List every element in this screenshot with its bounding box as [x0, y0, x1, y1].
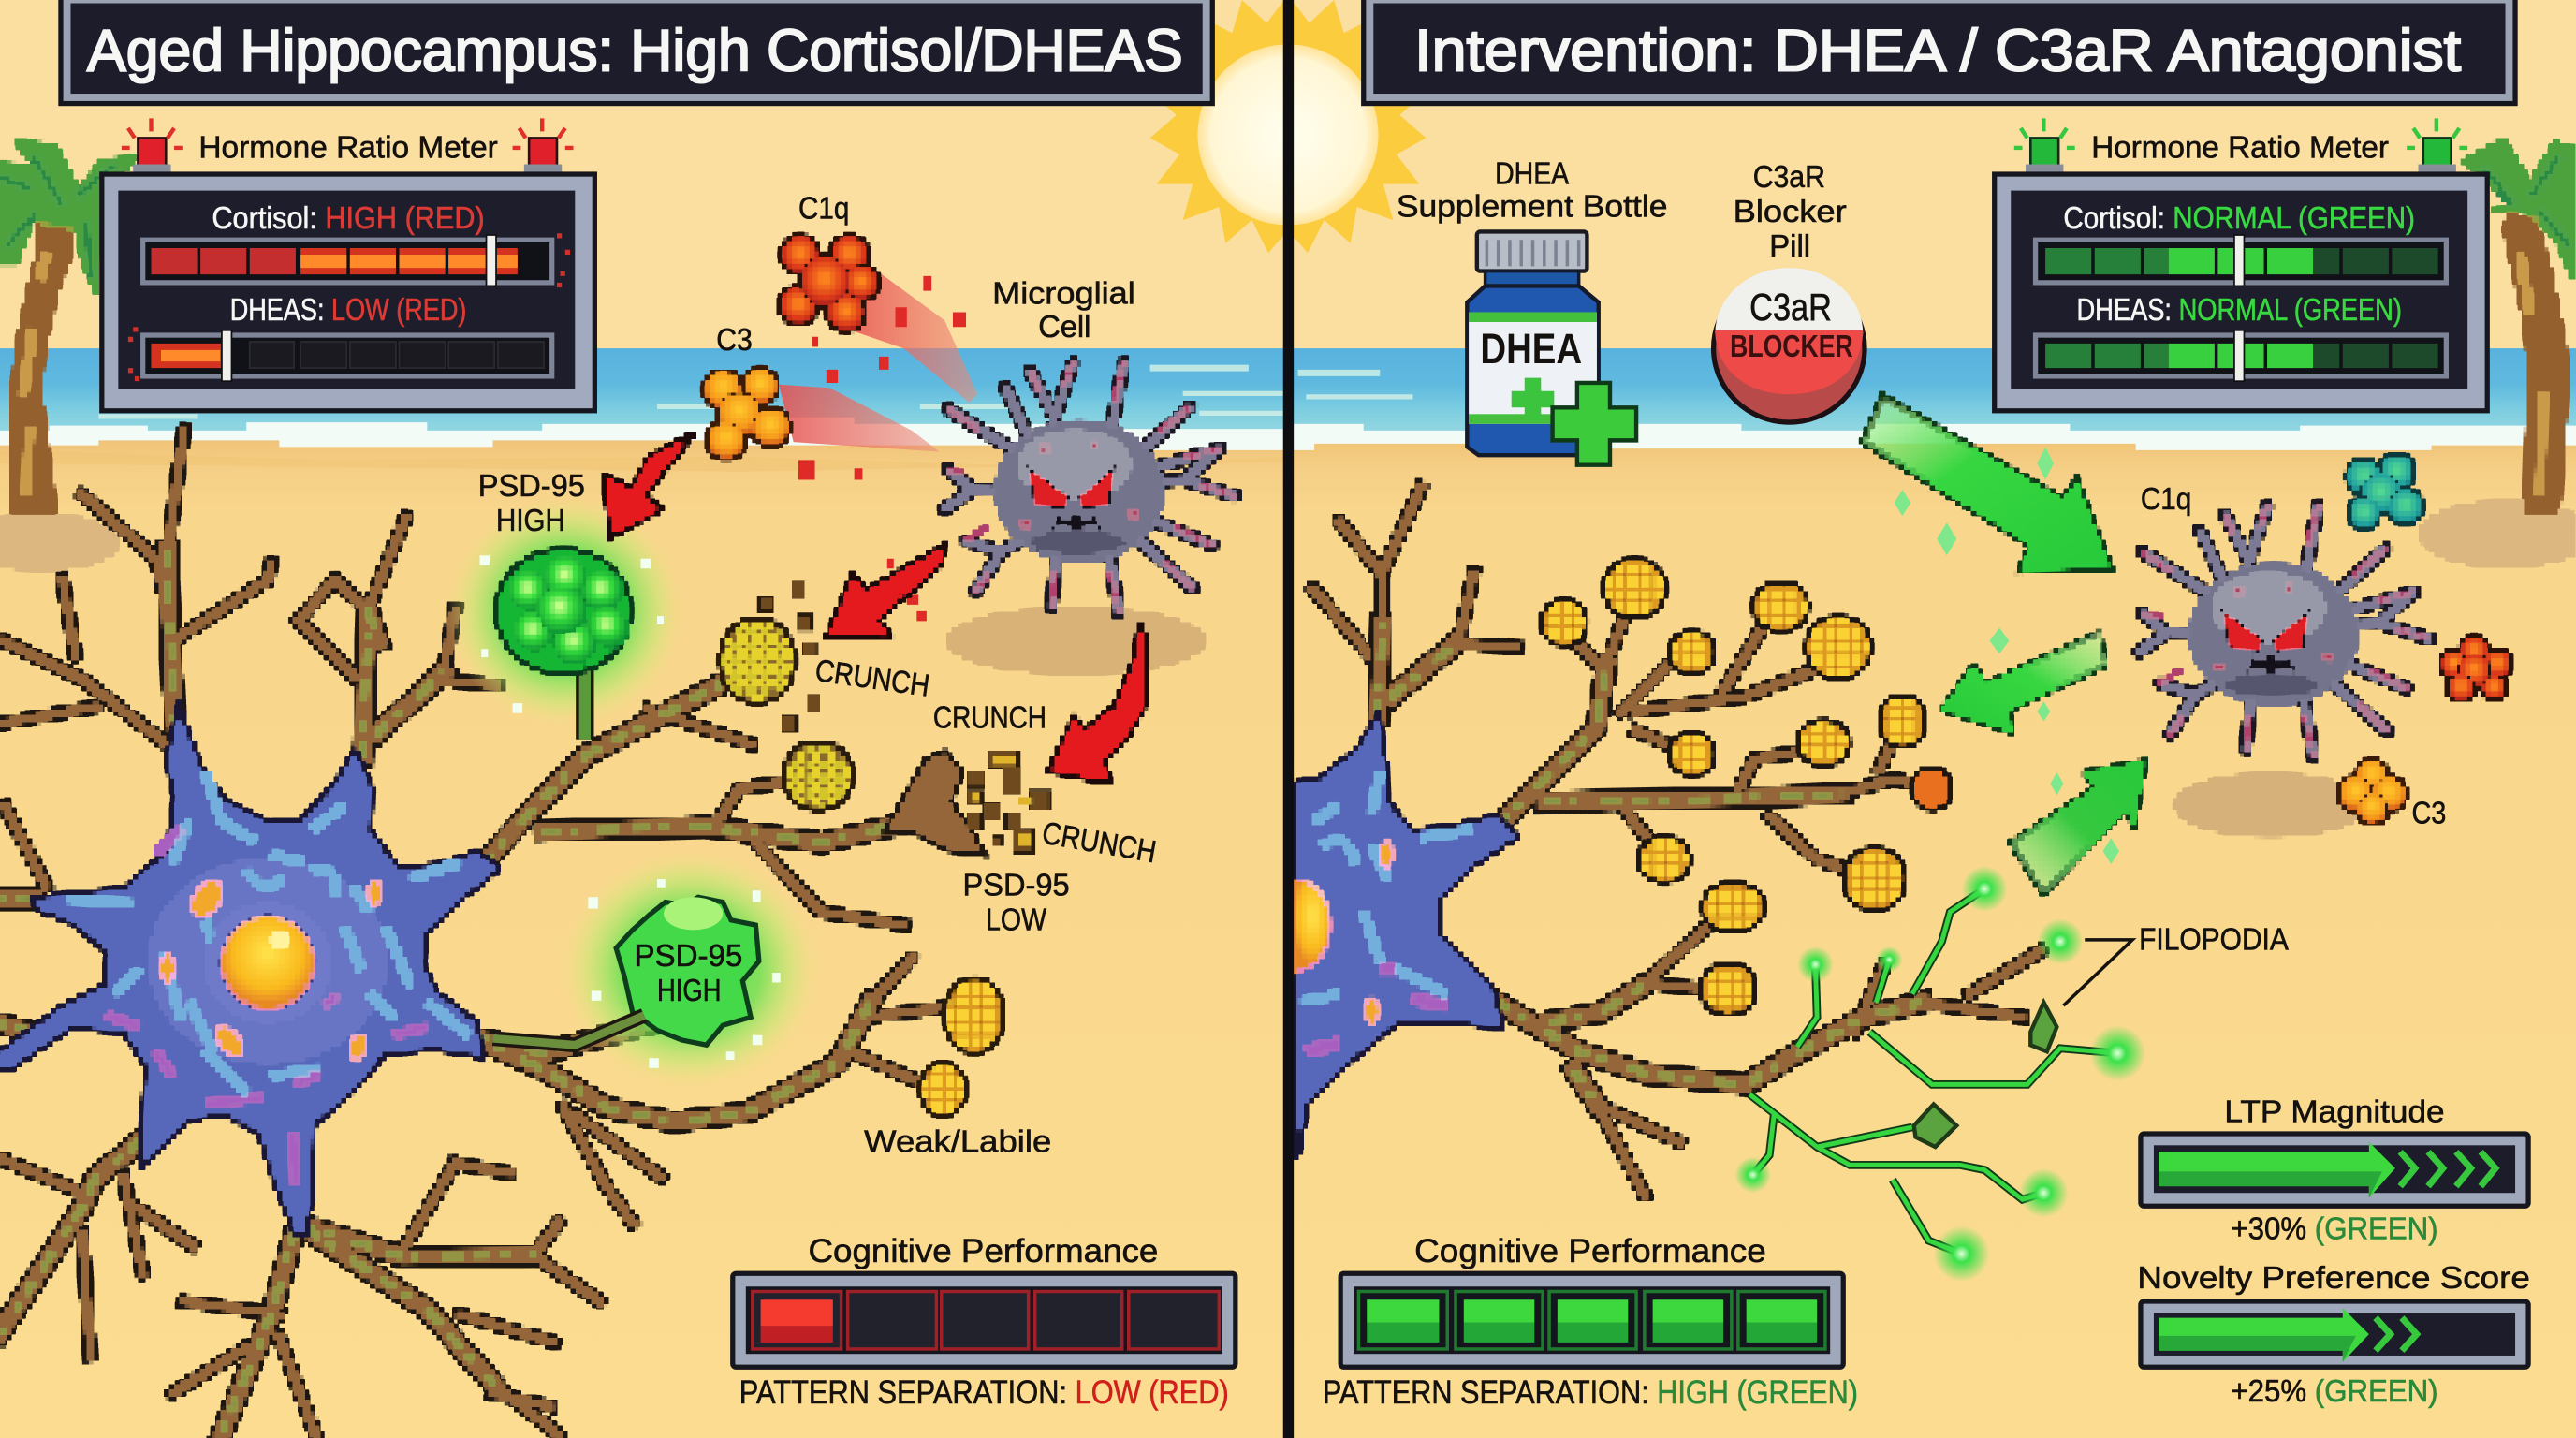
label: C3 left: C3: [716, 323, 753, 358]
C1q complement cluster left: [781, 237, 877, 330]
microglial cell left: [944, 363, 1236, 613]
LTP magnitude gauge: [2141, 1095, 2528, 1246]
C3 cluster right: [2339, 761, 2405, 823]
label: microglial cell: [992, 277, 1135, 345]
cortisol bar right: [2036, 235, 2446, 286]
cognitive performance right: Cognitive Performance: [1414, 1233, 1766, 1269]
label: PSD-95 low: LOW: [986, 902, 1046, 937]
label: PSD-95 low: [962, 869, 1070, 937]
blocker pill label: [1734, 160, 1847, 264]
red trails from microglia: [779, 266, 977, 621]
hormone meter right: Cortisol: NORMAL (GREEN): [2063, 201, 2415, 236]
arrow: red C3 to synapse: [605, 433, 694, 536]
label: meter heading with green lights: Hormone Ratio Meter: [2091, 130, 2389, 165]
microglial cell right: [2139, 506, 2430, 756]
label: crunch 1: CRUNCH: [813, 653, 931, 704]
green synapse stem and PSD-95 high spine: [446, 496, 683, 740]
hormone meter right: [1995, 118, 2487, 411]
label: C1q right: C1q: [2141, 482, 2191, 517]
supplement bottle label: DHEA: [1495, 157, 1570, 192]
palm tree right: [2420, 138, 2576, 567]
blocker pill label: C3aR: [1753, 160, 1825, 195]
label: meter heading with green lights: [2014, 118, 2467, 172]
label: microglial cell: Cell: [1038, 310, 1090, 345]
center divider: [1283, 0, 1294, 1438]
soma: left neuron: [0, 710, 498, 1232]
LTP magnitude gauge: LTP Magnitude: [2224, 1095, 2445, 1130]
icon: C3aR blocker pill: [1714, 268, 1865, 422]
DHEAS bar: [128, 327, 552, 381]
palm tree left: [0, 139, 138, 570]
right neuron dendrites: [1312, 488, 2041, 1195]
novelty preference gauge: +25% (GREEN): [2231, 1374, 2438, 1409]
supplement bottle label: [1397, 157, 1667, 225]
label: meter heading with alarm lights: Hormone Ratio Meter: [198, 130, 498, 165]
cognitive performance right: PATTERN SEPARATION: HIGH (GREEN): [1323, 1374, 1858, 1411]
cognitive performance left: [733, 1233, 1236, 1411]
novelty preference gauge: [2137, 1261, 2530, 1409]
title banner left: Aged Hippocampus: High Cortisol/DHEAS: [87, 18, 1183, 83]
filopodia label with bracket: FILOPODIA: [2139, 922, 2290, 957]
label: C3 right: C3: [2411, 796, 2446, 830]
blocker pill label: Pill: [1769, 229, 1810, 264]
PSD-95 high spine with text: HIGH: [657, 974, 721, 1008]
label: weak/labile: Weak/Labile: [864, 1124, 1051, 1159]
red cluster right: [2441, 638, 2510, 700]
weak spines and crunch debris left: [721, 583, 1048, 1114]
hormone meter left: Cortisol: HIGH (RED): [212, 201, 485, 236]
microglia shadow left: [948, 608, 1204, 674]
C1q teal blocked cluster right: [2348, 455, 2422, 527]
novelty preference gauge: Novelty Preference Score: [2137, 1261, 2530, 1296]
icon: DHEA bottle: DHEA: [1480, 325, 1582, 373]
filopodia label with bracket: [2063, 922, 2290, 1005]
label: C1q left: C1q: [798, 191, 849, 226]
arrow: green to microglia: [1863, 396, 2111, 721]
DHEAS bar right: [2036, 330, 2446, 381]
healthy spines right: [1543, 560, 1950, 1014]
icon: C3aR blocker pill: BLOCKER: [1730, 330, 1853, 364]
supplement bottle label: Supplement Bottle: [1397, 190, 1667, 225]
label: PSD-95 high (upper): PSD-95: [478, 469, 585, 504]
icon: C3aR blocker pill: C3aR: [1749, 286, 1832, 329]
title banner left: [61, 0, 1212, 104]
label: crunch 2: CRUNCH: [933, 701, 1046, 736]
hormone meter left: DHEAS: LOW (RED): [230, 293, 466, 328]
arrow: green toward spines: [1942, 633, 2106, 733]
blocker pill label: Blocker: [1734, 195, 1847, 229]
label: PSD-95 high (upper): [478, 469, 585, 538]
sun: [1150, 0, 1426, 253]
arrow: red curved crunch: [1050, 624, 1147, 782]
cognitive performance left: Cognitive Performance: [809, 1233, 1158, 1269]
arrow: red microglia to spine: [828, 547, 943, 638]
soma: right neuron: [1295, 716, 1516, 1155]
LTP magnitude gauge: +30% (GREEN): [2231, 1211, 2438, 1246]
cortisol bar: [143, 233, 570, 287]
hormone meter left: [102, 118, 594, 411]
C3 complement cluster left: [705, 370, 788, 459]
arrow: green filopodia to microglia: [2011, 761, 2145, 894]
microglia shadow right: [2175, 774, 2365, 836]
title banner right: [1364, 0, 2515, 104]
left neuron dendrites: [0, 431, 944, 1434]
cognitive performance right: [1323, 1233, 1858, 1411]
hormone meter right: DHEAS: NORMAL (GREEN): [2076, 293, 2402, 328]
label: meter heading with alarm lights: [122, 118, 574, 172]
label: PSD-95 low: PSD-95: [962, 869, 1070, 903]
filopodia green branches: [1734, 866, 2145, 1282]
label: PSD-95 high (upper): HIGH: [496, 504, 565, 538]
cognitive performance left: PATTERN SEPARATION: LOW (RED): [739, 1374, 1229, 1411]
icon: DHEA bottle: [1467, 231, 1636, 465]
PSD-95 high spine with text: PSD-95: [634, 939, 742, 974]
label: crunch 3: CRUNCH: [1039, 816, 1159, 870]
PSD-95 high spine with text: [493, 851, 818, 1088]
title banner right: Intervention: DHEA / C3aR Antagonist: [1414, 18, 2462, 83]
label: microglial cell: Microglial: [992, 277, 1135, 312]
